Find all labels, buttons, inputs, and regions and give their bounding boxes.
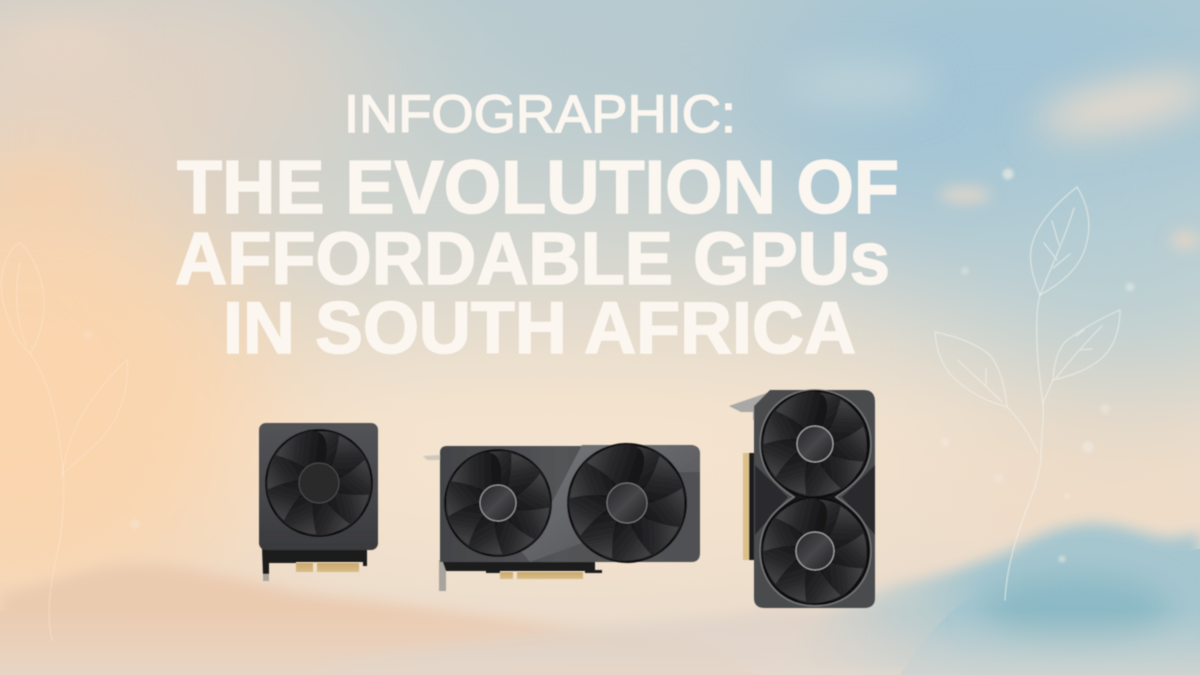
fan: top	[742, 372, 884, 515]
illustration: line-art plant, right	[935, 187, 1120, 600]
title block	[175, 85, 899, 369]
background: distant hills	[0, 524, 1200, 675]
title line: infographic label: INFOGRAPHIC:	[344, 85, 736, 144]
bokeh dots	[83, 168, 1134, 562]
GPU: dual-fan vertical card	[729, 372, 884, 622]
fan: bottom	[742, 479, 884, 622]
shroud	[754, 390, 875, 608]
shroud highlight band	[520, 445, 700, 562]
gold contacts	[743, 453, 749, 560]
shroud	[259, 423, 378, 550]
bracket	[262, 548, 269, 575]
fan: right	[543, 420, 708, 586]
blue hill core, keeps canvas edges solid under the blur	[900, 540, 1200, 675]
illustration: line-art plant, left	[1, 243, 128, 640]
bracket	[423, 455, 440, 460]
title line 1: THE EVOLUTION OF	[177, 145, 899, 229]
gold contacts	[296, 563, 359, 572]
PCB	[262, 546, 367, 566]
GPU: dual-fan horizontal card	[423, 420, 708, 591]
title line 2: AFFORDABLE GPUs	[175, 217, 890, 300]
fan	[252, 417, 383, 549]
peach hill core, keeps canvas edges solid under the blur	[0, 582, 760, 675]
bracket	[729, 390, 790, 420]
low mist	[0, 610, 1200, 675]
gold contacts	[500, 572, 583, 579]
title line 3: IN SOUTH AFRICA	[223, 288, 856, 369]
shroud	[440, 446, 700, 562]
GPU: compact single-fan card	[252, 417, 383, 581]
PCB	[442, 560, 602, 573]
dark mid panels	[755, 465, 875, 535]
figure-eight trim	[760, 390, 871, 606]
fan: left	[439, 445, 554, 562]
